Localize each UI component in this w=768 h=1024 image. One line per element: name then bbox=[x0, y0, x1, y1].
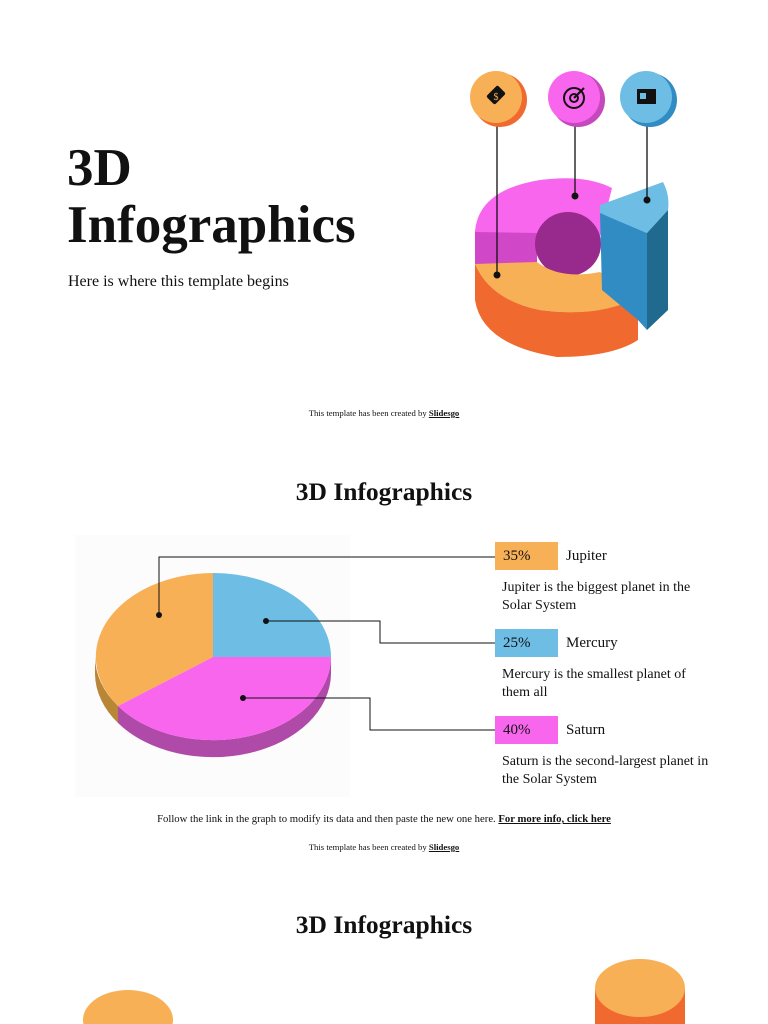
leader lines bbox=[497, 125, 647, 275]
orange top face bbox=[475, 262, 638, 312]
icon: presentation bbox=[620, 71, 677, 127]
icon: price tag: $ bbox=[494, 92, 498, 103]
orange slice bbox=[96, 573, 213, 706]
hole bbox=[535, 212, 601, 276]
pink slice bbox=[118, 657, 331, 740]
subtitle: Here is where this template begins bbox=[68, 273, 289, 290]
connectors bbox=[159, 557, 495, 730]
3D donut chart with icons bbox=[470, 71, 677, 357]
credit 2: This template has been created by Slidesgo bbox=[309, 842, 459, 852]
credit 1: This template has been created by Slidesgo bbox=[309, 408, 459, 418]
pie sides bbox=[95, 657, 118, 723]
legend: Mercury: 25% bbox=[503, 635, 530, 651]
orange side bbox=[475, 262, 638, 357]
blue slice bbox=[213, 573, 331, 657]
title: 3D bbox=[67, 139, 132, 197]
legend: Jupiter bbox=[495, 542, 690, 613]
note: Follow the link in the graph to modify its data and then paste the new one here. For more info, click here bbox=[157, 813, 611, 825]
icon: price tag bbox=[470, 71, 527, 127]
legend: Mercury bbox=[495, 629, 686, 700]
section 2 heading: 3D Infographics bbox=[296, 477, 472, 506]
title: Infographics bbox=[67, 196, 356, 254]
pink top face bbox=[475, 178, 612, 236]
pink side bbox=[475, 230, 537, 264]
legend: Saturn: Saturn bbox=[566, 722, 605, 738]
legend: Saturn: 40% bbox=[503, 722, 530, 738]
icon: target bbox=[548, 71, 605, 127]
legend: Jupiter: Jupiter is the biggest planet in the Solar System bbox=[502, 580, 690, 613]
legend: Jupiter: Jupiter bbox=[566, 548, 607, 564]
legend: Mercury: Mercury bbox=[566, 635, 618, 651]
legend: Saturn bbox=[495, 716, 708, 787]
legend: Mercury: Mercury is the smallest planet of them all bbox=[502, 667, 686, 700]
legend: Jupiter: 35% bbox=[503, 548, 530, 564]
cylinders bbox=[83, 959, 685, 1024]
title bbox=[67, 139, 356, 254]
section 3 heading: 3D Infographics bbox=[296, 910, 472, 939]
pie chart bbox=[95, 556, 495, 758]
legend: Saturn: Saturn is the second-largest planet in the Solar System bbox=[502, 754, 708, 787]
blue wedge bbox=[600, 182, 668, 233]
